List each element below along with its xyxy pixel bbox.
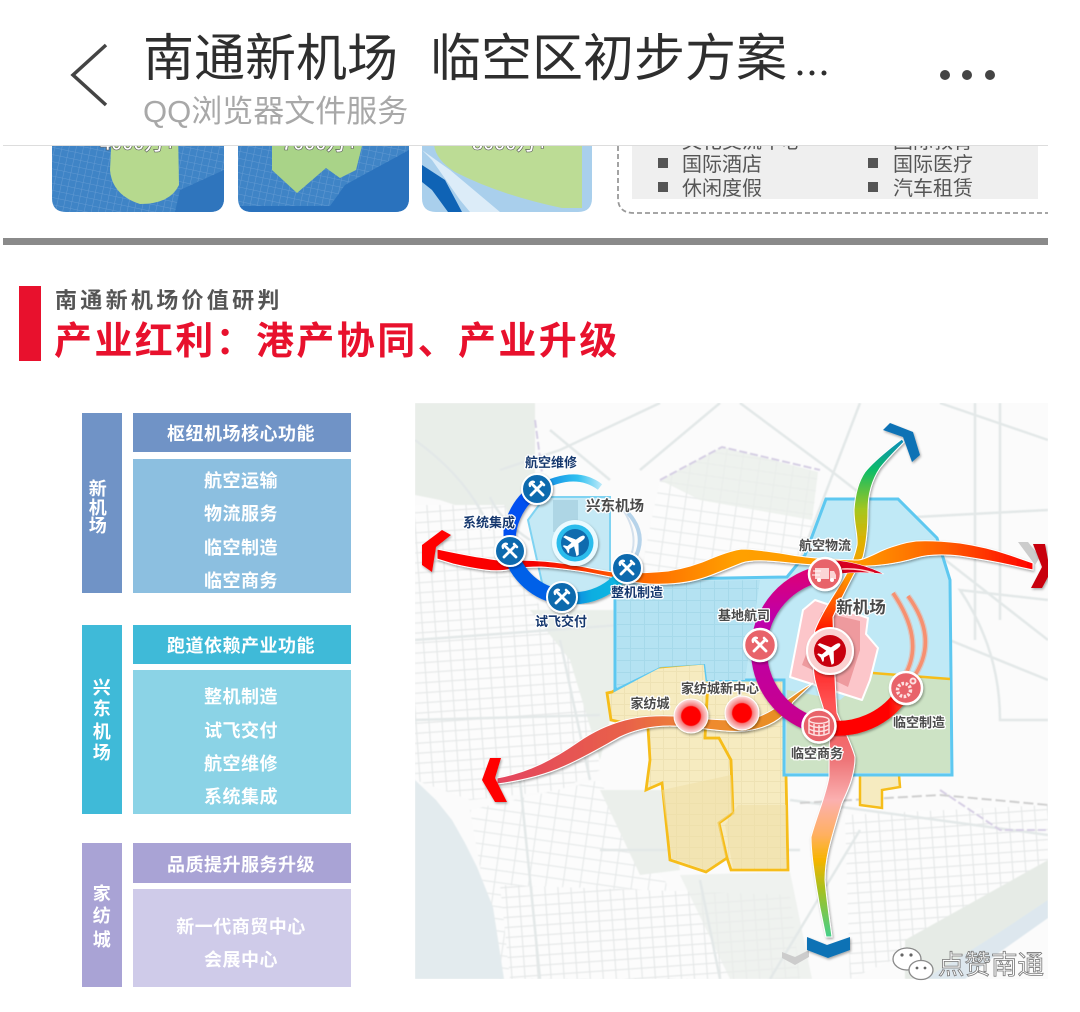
arrow: west red [422,530,451,572]
side label [82,843,122,987]
thumbnail map 1: 4000万+ [100,133,176,155]
label: 整机制造: 整机制造 [611,585,663,600]
icon: aviation maintenance node [522,474,552,504]
icon: more menu [940,70,995,80]
function list: 临空制造 [204,537,278,558]
icon: wechat logo [893,948,933,980]
thumbnail map 2: 7000万+ [282,133,358,155]
service list panel: 国际医疗 [893,153,973,176]
ribbon: vertical corridor [811,439,904,937]
side label: 纺 [93,905,111,926]
header row [133,625,351,664]
function list: 临空商务 [204,570,278,591]
icon: system integration node [495,536,525,566]
Xingdong airport site [528,497,610,598]
function list: 航空维修 [204,753,278,774]
icon: textile city node east [725,696,759,730]
label: 基地航司: 基地航司 [718,608,770,623]
arrow: south grey [782,950,809,965]
arrow: east red [1031,544,1048,588]
arrow: south blue [807,937,850,958]
side label: 场 [93,743,111,763]
label: 家纺城: 家纺城 [630,696,670,711]
west blocks inside zone [617,580,760,688]
panel: new airport functions [82,413,351,593]
green logistics area [786,673,950,773]
panel: Xingdong airport functions [82,625,351,814]
header row: 枢纽机场核心功能 [167,423,315,444]
label: 兴东机场: 兴东机场 [586,497,644,515]
side label: 新 [89,478,107,499]
service list panel: 国际教育 [893,130,973,153]
textile city zone west [607,663,733,872]
watermark text: 点赞南通 [938,950,1044,980]
service list panel: 汽车租赁 [893,177,973,200]
section divider bar [3,238,1048,245]
function list: 系统集成 [204,786,278,807]
label: 临空商务: 临空商务 [791,746,843,761]
heading accent bar [19,286,41,361]
thumbnail map 3 [422,146,592,212]
green edge line [873,673,950,679]
function list: 物流服务 [204,504,278,524]
thumbnail map 1 [52,146,224,212]
previous page fragment [52,146,1048,214]
watermark [893,948,1044,980]
side label [82,625,122,814]
function list [133,670,351,814]
icon: back arrow [73,45,106,105]
ring: new airport [759,560,925,728]
label: 航空物流: 航空物流 [799,538,851,553]
function list: 整机制造 [204,687,278,707]
thumbnail map 2 [238,146,409,212]
label: 试飞交付: 试飞交付 [535,614,587,629]
ring: Xingdong airport [509,478,640,598]
icon: airport business node [802,710,836,742]
side label: 家 [93,883,111,904]
service list panel: 休闲度假 [682,177,762,200]
icon: aircraft manufacturing node [612,553,642,583]
side label: 兴 [93,678,111,698]
service list panel: 文化交流中心 [682,130,802,153]
thumbnail map 3: 8000万+ [472,133,548,155]
header title: 南通新机场 [143,30,398,87]
section heading [19,286,620,363]
new airport site [790,600,878,700]
service list panel [618,130,1048,213]
Xingdong runway block [553,500,578,532]
icon: test flight node [547,582,577,612]
label: 航空维修: 航空维修 [525,455,577,470]
heading title: 产业红利：港产协同、产业升级 [54,321,620,363]
east yellow plot [860,775,900,808]
textile city lower shading [662,775,786,870]
header row [133,413,351,452]
icon: Xingdong airport plane [552,520,598,566]
title ellipsis [798,70,826,76]
arrow: east grey [1018,542,1040,565]
icon: textile city node west [674,699,708,733]
airport development zone [615,499,952,775]
header subtitle: QQ浏览器文件服务 [143,94,408,129]
icon: new airport plane [807,628,853,674]
function list: 试飞交付 [204,720,278,741]
side label: 场 [89,516,107,536]
panel: textile city functions [82,843,351,987]
icon: airport manufacturing gear node [890,672,922,704]
icon: base airline node [744,629,776,661]
label: 新机场: 新机场 [836,597,886,617]
function list: 会展中心 [204,950,278,970]
icon: air logistics truck node [809,558,841,590]
service list panel: 国际酒店 [682,153,762,176]
label: 家纺城新中心: 家纺城新中心 [681,681,759,696]
side label: 机 [89,498,107,518]
arrow: north blue [883,423,920,462]
function list: 航空运输 [204,470,278,491]
map [415,403,1048,980]
function list [133,459,351,593]
header row [133,843,351,883]
header title continued: 临空区初步方案 [430,30,787,87]
side label [82,413,122,593]
side label: 机 [93,722,111,742]
label: 系统集成: 系统集成 [463,515,515,530]
side label: 城 [93,929,111,950]
function list: 新一代商贸中心 [176,916,306,937]
function list [133,889,351,987]
side label: 东 [93,698,111,719]
header row: 跑道依赖产业功能 [167,635,315,656]
app header bar [0,0,1080,146]
header row: 品质提升服务升级 [167,854,315,875]
ribbon: lower left corridor [497,683,813,784]
ribbon: horizontal corridor [437,541,1033,584]
arrow: southwest red [482,758,507,802]
base map [415,403,1048,980]
textile city zone east [705,680,788,870]
heading kicker: 南通新机场价值研判 [55,288,283,313]
label: 临空制造: 临空制造 [893,715,945,730]
